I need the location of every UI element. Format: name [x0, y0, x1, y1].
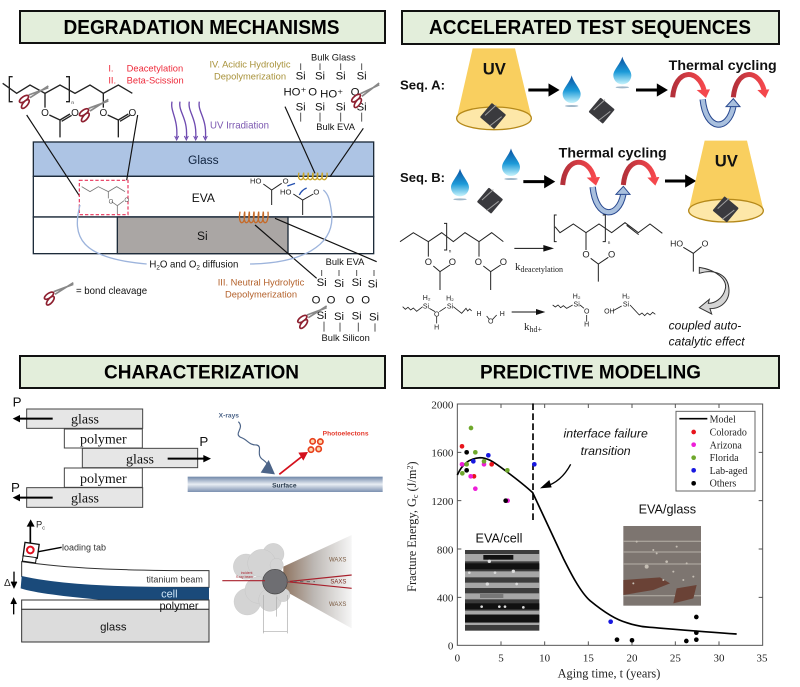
bulk silicon interface structure: Si	[334, 278, 344, 290]
panel: accelerated test sequences	[400, 48, 777, 349]
diffusion label: 2	[196, 265, 200, 272]
mechanism labels: II.	[108, 76, 116, 86]
siloxane reactants: O	[488, 318, 494, 325]
deacetylation arrow: k	[515, 261, 520, 273]
auto-catalytic label: coupled auto-	[669, 319, 741, 333]
dimension marks	[263, 595, 287, 633]
legend	[676, 411, 755, 491]
EVA polymer structure: O	[41, 108, 49, 119]
label IV	[209, 60, 291, 82]
EVA reactant: O	[425, 257, 432, 267]
scattering labels: SAXS	[330, 580, 346, 586]
bulk silicon interface structure: Bulk Silicon	[322, 333, 370, 343]
acetic acid	[670, 239, 709, 272]
data points	[460, 426, 699, 643]
seq B label: Seq. B:	[400, 170, 445, 185]
hydrolysis arrow: k	[524, 321, 529, 333]
axis titles: 2	[406, 466, 415, 470]
diffusion label: 2	[156, 265, 160, 272]
transition annotation: transition	[581, 444, 631, 458]
tick labels: 35	[757, 652, 768, 664]
axis titles: Aging time, t (years)	[558, 667, 660, 681]
surface slab: Surface	[272, 482, 297, 489]
bulk glass interface structure: Si	[357, 102, 367, 114]
bulk silicon interface structure: O	[346, 294, 355, 306]
siloxane reactants: O	[434, 312, 440, 319]
hydrolysis arrow	[512, 309, 545, 334]
acetic acid in EVA: O	[283, 177, 289, 186]
EVA polymer structure: O	[71, 108, 79, 119]
scissors: silicon interface	[297, 306, 327, 330]
mechanism labels	[108, 64, 184, 86]
scissors: glass interface	[349, 83, 381, 109]
seq A label: Seq. A:	[400, 77, 445, 92]
tick labels: 25	[670, 652, 681, 664]
moisture and cell	[563, 57, 631, 124]
bond cleavage key: = bond cleavage	[76, 286, 147, 297]
loading tab: c	[42, 525, 45, 531]
tick labels: 20	[627, 652, 638, 664]
leader lines	[27, 107, 377, 278]
bulk glass interface structure	[284, 53, 367, 132]
siloxane reactants: H	[476, 311, 482, 318]
diffusion label: H	[149, 260, 156, 271]
scattering labels: X-ray beam	[236, 575, 253, 579]
loading tab	[22, 519, 106, 563]
siloxane products: H₂	[622, 294, 630, 301]
thermal cycling B: Thermal cycling	[559, 146, 667, 161]
bulk silicon interface structure: O	[312, 294, 321, 306]
bulk glass interface structure: O	[351, 87, 360, 99]
panel: predictive modeling chart	[405, 399, 768, 681]
acetic acid in EVA: HO	[250, 177, 262, 186]
mechanism labels: Beta-Scission	[127, 76, 184, 86]
siloxane products: H₂	[573, 293, 581, 300]
bulk glass interface structure: Si	[315, 102, 325, 114]
header: accelerated test sequences: ACCELERATED TEST SEQUENCES	[429, 17, 751, 39]
label III: Depolymerization	[225, 290, 297, 300]
lap shear specimen: P	[11, 480, 20, 495]
auto-catalytic label	[669, 319, 745, 349]
EVA/cell inset: EVA/cell	[476, 531, 522, 545]
lap shear specimen: P	[199, 434, 208, 449]
glass substrate	[22, 574, 209, 642]
bulk glass interface structure: Bulk EVA	[316, 122, 356, 132]
scattering labels	[236, 557, 346, 608]
bulk silicon interface structure: Si	[368, 279, 378, 291]
siloxane reactants: H	[434, 324, 439, 331]
dashed EVA region: O	[124, 198, 129, 204]
siloxane reactants: Si	[447, 304, 454, 311]
EVA/glass inset: EVA/glass	[639, 502, 696, 516]
siloxane products: H	[584, 322, 589, 329]
tick labels: 800	[437, 544, 454, 556]
scattering labels: WAXS	[329, 557, 346, 563]
EVA/cell inset	[465, 531, 539, 631]
XPS diagram	[188, 412, 383, 492]
legend: Florida	[710, 453, 739, 464]
axis titles: c	[411, 494, 420, 498]
label III: III. Neutral Hydrolytic	[218, 277, 305, 287]
acetic acid in EVA: HO	[280, 187, 292, 196]
deacetylation arrow: deacetylation	[520, 265, 563, 274]
label IV: IV. Acidic Hydrolytic	[209, 60, 291, 70]
siloxane products	[553, 293, 655, 329]
Lab-aged points	[471, 453, 613, 624]
EVA reactant: O	[500, 257, 507, 267]
lap shear specimen: polymer	[80, 472, 127, 487]
tick labels: 1200	[431, 496, 454, 508]
moisture and cell	[451, 148, 520, 214]
siloxane products: Si	[623, 302, 630, 309]
EVA product: n	[608, 240, 611, 245]
siloxane products: Si	[574, 302, 580, 309]
dashed EVA region: O	[109, 199, 114, 205]
transition annotation: interface failure	[564, 427, 648, 441]
glass substrate: polymer	[159, 600, 199, 612]
hydrolysis arrow: hd+	[529, 325, 542, 334]
Colorado points	[460, 444, 494, 479]
glass substrate: titanium beam	[146, 574, 203, 584]
EVA polymer structure: O	[128, 108, 136, 119]
bulk glass interface structure: Si	[357, 71, 367, 83]
tick labels: 1600	[431, 448, 454, 460]
tick labels: 0	[448, 640, 454, 652]
bulk silicon interface structure: Si	[334, 311, 344, 323]
legend: Arizona	[710, 440, 742, 451]
siloxane reactants: H	[500, 311, 505, 318]
sequence A	[400, 48, 777, 130]
sphere cluster	[233, 543, 290, 615]
tick labels: 400	[437, 593, 454, 605]
diffusion path	[77, 190, 332, 264]
label IV: Depolymerization	[214, 72, 286, 82]
legend: Lab-aged	[710, 466, 747, 477]
bulk silicon interface structure: Si	[352, 310, 362, 322]
siloxane products: OH	[604, 308, 615, 315]
siloxane reactants	[403, 295, 505, 331]
lap shear specimen	[11, 395, 211, 507]
bulk glass interface structure: Si	[296, 102, 306, 114]
beam layers	[22, 562, 209, 587]
acetic acid in EVA	[250, 177, 319, 215]
tick labels: 30	[714, 652, 725, 664]
photoelectrons	[279, 431, 369, 474]
module layer stack	[33, 142, 374, 254]
tick labels: 0	[455, 652, 461, 664]
yellow coil	[298, 173, 327, 180]
lap shear specimen: P	[13, 395, 22, 410]
scattering cone	[283, 535, 352, 628]
DCB fracture specimen	[4, 519, 209, 642]
sequence B	[400, 141, 764, 222]
UV arrows	[172, 102, 207, 140]
acetic acid in EVA: O	[313, 187, 319, 196]
bulk silicon interface structure: Bulk EVA	[326, 257, 365, 267]
header: characterization: CHARACTERIZATION	[104, 362, 299, 384]
tick labels: 10	[539, 652, 551, 664]
UV cone A: UV	[483, 59, 506, 78]
diffusion label: O and O	[160, 260, 197, 271]
Arizona points	[460, 462, 510, 503]
bulk glass interface structure: Si	[315, 71, 325, 83]
arrow	[523, 178, 552, 186]
tick labels: 5	[498, 652, 504, 664]
tick labels: 2000	[431, 399, 454, 411]
lap shear specimen: polymer	[80, 432, 127, 447]
lap shear specimen: glass	[71, 412, 99, 427]
mechanism labels: Deacetylation	[127, 64, 183, 74]
EVA polymer structure: O	[99, 108, 107, 119]
legend: Colorado	[710, 427, 747, 438]
bulk silicon interface structure: Si	[317, 277, 327, 289]
cell layer: cell	[161, 589, 178, 601]
bulk silicon interface structure: O	[327, 294, 336, 306]
bulk glass interface structure: O	[308, 87, 317, 99]
label III	[218, 277, 305, 300]
header: predictive modeling	[402, 356, 779, 388]
thermal cycling A	[669, 58, 777, 125]
EVA polymer structure: n	[71, 100, 74, 105]
beams	[222, 575, 352, 588]
bulk silicon interface structure: Si	[369, 312, 379, 324]
auto-catalytic label: catalytic effect	[669, 335, 745, 349]
axis titles: (J/m	[405, 469, 419, 495]
bulk glass interface structure: Si	[336, 102, 346, 114]
axis titles: Fracture Energy, G	[405, 498, 419, 592]
bulk glass interface structure: HO⁺	[284, 87, 306, 99]
tick labels: 15	[583, 652, 594, 664]
legend: Others	[710, 479, 736, 490]
orange coil	[239, 212, 268, 223]
header: degradation mechanisms	[20, 11, 385, 43]
dashed EVA region	[79, 180, 129, 215]
acetic acid: O	[702, 239, 709, 249]
cell layer	[21, 576, 209, 601]
x-ray wave: X-rays	[219, 412, 239, 419]
axes	[457, 404, 763, 645]
model curve	[457, 458, 737, 634]
bulk glass interface structure: Si	[296, 71, 306, 83]
bulk glass interface structure: Si	[336, 71, 346, 83]
header: predictive modeling: PREDICTIVE MODELING	[480, 362, 701, 384]
EVA polymer structure	[3, 77, 136, 137]
scissors on polymer	[18, 86, 108, 123]
x-ray wave	[219, 412, 275, 474]
transition annotation	[564, 427, 648, 458]
thermal cycling B	[559, 146, 667, 212]
transition line	[530, 403, 535, 520]
glass substrate: glass	[100, 621, 127, 633]
EVA reactant: O	[475, 257, 482, 267]
panel: characterization	[4, 395, 383, 642]
bulk glass interface structure: Bulk Glass	[311, 53, 356, 63]
EVA reactant: n	[449, 248, 452, 253]
axis titles: )	[405, 461, 419, 466]
scattering labels: WAXS	[329, 602, 346, 608]
bulk glass interface structure: HO⁺	[320, 88, 343, 100]
surface slab	[188, 477, 383, 492]
EVA/glass inset	[623, 502, 701, 606]
siloxane reactants: H₂	[423, 295, 431, 302]
siloxane reactants: Si	[423, 303, 430, 310]
axis titles	[405, 461, 660, 681]
header: accelerated test sequences	[402, 11, 779, 44]
photoelectrons: Photoelectons	[323, 431, 369, 438]
displacement arrows	[4, 572, 17, 614]
bulk silicon interface structure: O	[361, 294, 370, 306]
bond cleavage key	[43, 283, 147, 306]
sample particle	[263, 569, 287, 594]
module layer stack: Glass	[188, 153, 219, 167]
bulk silicon interface structure: Si	[352, 277, 362, 289]
legend: Model	[710, 414, 736, 425]
thermal cycling A: Thermal cycling	[669, 58, 777, 73]
arrow	[636, 86, 665, 94]
UV cone A	[457, 48, 532, 130]
EVA reactant: O	[449, 257, 456, 267]
Florida points	[460, 426, 510, 476]
siloxane reactants: H₂	[446, 296, 454, 303]
UV cone B: UV	[715, 152, 738, 171]
SAXS WAXS diagram	[222, 535, 352, 633]
header: characterization	[20, 356, 385, 388]
mechanism labels: I.	[108, 64, 114, 74]
panel: degradation mechanisms	[3, 53, 381, 343]
EVA reactant	[400, 223, 507, 290]
displacement arrows: Δ	[4, 578, 11, 589]
lap shear specimen: glass	[126, 452, 154, 467]
bulk silicon interface structure: Si	[317, 310, 327, 322]
UV label: UV Irradiation	[210, 120, 269, 131]
EVA product: O	[608, 250, 615, 260]
lap shear specimen: glass	[71, 492, 99, 507]
scattering labels: incident	[241, 571, 252, 575]
EVA product	[554, 215, 662, 282]
tick labels	[431, 399, 768, 664]
loading tab: P	[36, 519, 42, 529]
Others points	[464, 450, 699, 643]
UV cone B	[689, 141, 764, 222]
transition arrow	[540, 464, 571, 488]
loading tab: loading tab	[62, 543, 106, 553]
module layer stack: EVA	[192, 191, 215, 205]
deacetylation arrow	[514, 245, 563, 274]
diffusion label: diffusion	[200, 260, 238, 271]
EVA product: O	[582, 250, 590, 260]
header: degradation mechanisms: DEGRADATION MECHANISMS	[64, 17, 340, 39]
module layer stack: Si	[197, 229, 208, 243]
acetic acid: HO	[670, 239, 683, 249]
arrow	[665, 177, 693, 185]
bulk silicon interface structure	[312, 257, 379, 343]
auto-catalytic curved arrow	[699, 267, 729, 314]
arrow	[528, 86, 557, 94]
siloxane products: O	[584, 308, 590, 315]
